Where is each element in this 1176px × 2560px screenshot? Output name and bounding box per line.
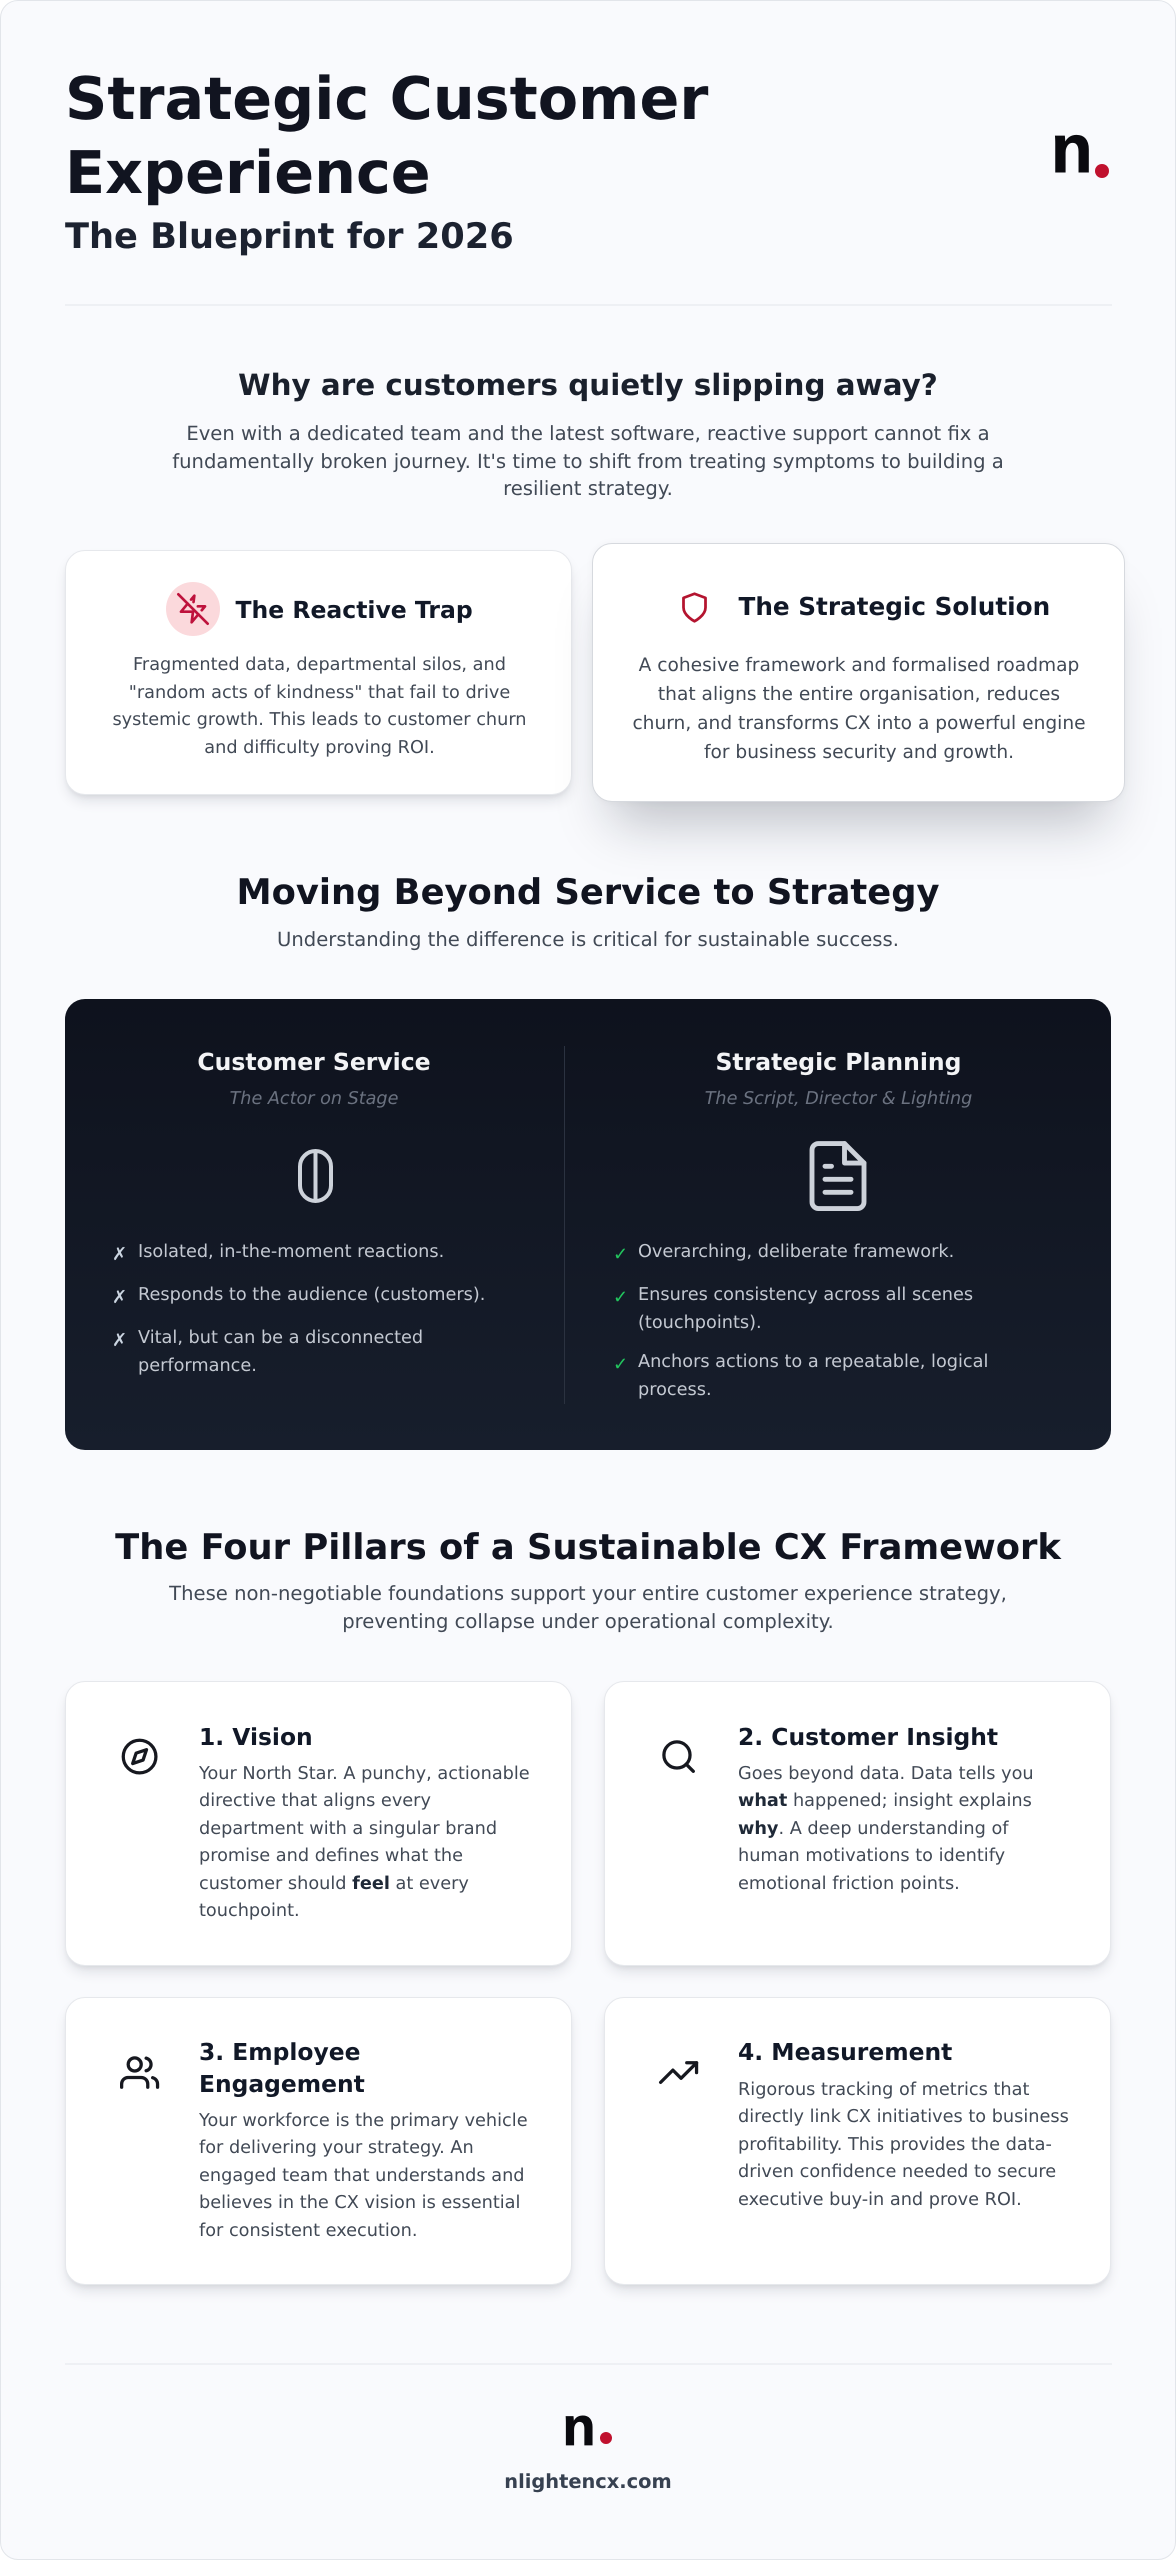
intro paragraph: fundamentally broken journey. It's time to shift from treating symptoms to building a bbox=[172, 450, 1004, 473]
logo: footer: n bbox=[562, 2397, 596, 2457]
section intro: preventing collapse under operational complexity. bbox=[342, 1610, 834, 1633]
pillar text: Goes beyond data. Data tells you bbox=[738, 1764, 1034, 1784]
column: strategic planning bbox=[613, 1048, 988, 1400]
card text: churn, and transforms CX into a powerful engine bbox=[632, 713, 1086, 734]
pillar text: Your North Star. A punchy, actionable bbox=[199, 1764, 530, 1784]
pillar text: touchpoint. bbox=[199, 1901, 300, 1921]
pillar text: promise and defines what the bbox=[199, 1846, 463, 1866]
card text: that aligns the entire organisation, reduces bbox=[658, 684, 1060, 705]
panel: service vs strategy bbox=[65, 999, 1111, 1450]
card text: A cohesive framework and formalised roadmap bbox=[639, 655, 1079, 676]
pillar text: engaged team that understands and bbox=[199, 2166, 525, 2186]
footer url: nlightencx.com bbox=[504, 2470, 672, 2493]
card text: "random acts of kindness" that fail to drive bbox=[129, 683, 510, 703]
list: strategy benefits: ✓ bbox=[613, 1244, 628, 1265]
pillar text: executive buy-in and prove ROI. bbox=[738, 2190, 1022, 2210]
pillar text: Your workforce is the primary vehicle bbox=[199, 2111, 528, 2131]
card text bbox=[112, 655, 527, 758]
card heading: The Strategic Solution bbox=[738, 592, 1050, 621]
card text: for business security and growth. bbox=[704, 742, 1014, 763]
panel: pillar 3 employee engagement bbox=[65, 1997, 572, 2285]
pillar text: believes in the CX vision is essential bbox=[199, 2193, 520, 2213]
intro paragraph: Even with a dedicated team and the latest software, reactive support cannot fix a bbox=[186, 422, 990, 445]
icon: trending up bbox=[658, 2061, 698, 2084]
list: strategy benefits bbox=[613, 1242, 988, 1400]
heading: moving beyond: Moving Beyond Service to Strategy bbox=[236, 872, 940, 912]
list: service limitations bbox=[112, 1242, 485, 1376]
icon: zap off bbox=[166, 582, 220, 636]
list: strategy benefits: Overarching, deliberate framework. bbox=[638, 1242, 954, 1262]
card heading: The Reactive Trap bbox=[236, 596, 473, 624]
list: service limitations: Isolated, in-the-moment reactions. bbox=[138, 1242, 444, 1262]
panel: the strategic solution bbox=[592, 543, 1124, 802]
list: service limitations: ✗ bbox=[112, 1330, 127, 1351]
list: service limitations: Vital, but can be a disconnected bbox=[138, 1328, 423, 1348]
intro paragraph bbox=[172, 422, 1004, 500]
column heading: Customer Service bbox=[197, 1048, 431, 1076]
pillar text: emotional friction points. bbox=[738, 1874, 960, 1894]
pillar heading: 4. Measurement bbox=[738, 2038, 952, 2066]
icon: document bbox=[810, 1141, 866, 1211]
heading: four pillars: The Four Pillars of a Sustainable CX Framework bbox=[115, 1526, 1061, 1568]
list: strategy benefits: ✓ bbox=[613, 1287, 628, 1308]
pillar text: for delivering your strategy. An bbox=[199, 2138, 474, 2158]
list: strategy benefits: Anchors actions to a repeatable, logical bbox=[638, 1352, 988, 1372]
pillar text: Rigorous tracking of metrics that bbox=[738, 2080, 1029, 2100]
list: strategy benefits: ✓ bbox=[613, 1354, 628, 1375]
pillar text bbox=[199, 2111, 528, 2241]
card text bbox=[632, 655, 1086, 763]
card text: systemic growth. This leads to customer churn bbox=[112, 710, 527, 730]
list: service limitations: ✗ bbox=[112, 1244, 127, 1265]
pillar text: for consistent execution. bbox=[199, 2221, 417, 2241]
icon: search bbox=[662, 1740, 695, 1773]
intro paragraph: resilient strategy. bbox=[503, 477, 673, 500]
icon: actor bbox=[298, 1149, 333, 1203]
pillar text bbox=[738, 1764, 1034, 1894]
section intro: Understanding the difference is critical for sustainable success. bbox=[277, 928, 899, 951]
card text: Fragmented data, departmental silos, and bbox=[133, 655, 506, 675]
panel: pillar 2 customer insight bbox=[604, 1681, 1111, 1966]
pillar heading: 2. Customer Insight bbox=[738, 1723, 998, 1751]
pillar heading bbox=[199, 2038, 365, 2098]
section intro: These non-negotiable foundations support your entire customer experience strategy, bbox=[169, 1582, 1007, 1605]
list: service limitations: performance. bbox=[138, 1356, 257, 1376]
card text: and difficulty proving ROI. bbox=[204, 738, 435, 758]
section intro bbox=[169, 1582, 1007, 1633]
list: service limitations: Responds to the audience (customers). bbox=[138, 1285, 485, 1305]
title: Experience bbox=[65, 138, 431, 206]
panel: the reactive trap bbox=[65, 550, 572, 795]
logo: header: n bbox=[1051, 111, 1093, 187]
logo: footer bbox=[562, 2397, 612, 2457]
column subtitle: The Actor on Stage bbox=[230, 1089, 398, 1109]
list: strategy benefits: Ensures consistency across all scenes bbox=[638, 1285, 973, 1305]
pillar text bbox=[199, 1764, 530, 1921]
pillar text: directive that aligns every bbox=[199, 1791, 431, 1811]
subtitle: The Blueprint for 2026 bbox=[65, 216, 514, 257]
pillar text: what happened; insight explains bbox=[738, 1791, 1032, 1811]
pillar heading: Engagement bbox=[199, 2070, 365, 2098]
panel: pillar 1 vision bbox=[65, 1681, 572, 1966]
icon: compass bbox=[122, 1738, 158, 1774]
pillar text: department with a singular brand bbox=[199, 1819, 497, 1839]
title: Strategic Customer bbox=[65, 64, 708, 133]
pillar text bbox=[738, 2080, 1069, 2210]
pillar text: customer should feel at every bbox=[199, 1874, 469, 1894]
pillar text: why. A deep understanding of bbox=[738, 1819, 1009, 1839]
pillar text: driven confidence needed to secure bbox=[738, 2162, 1056, 2182]
pillar text: human motivations to identify bbox=[738, 1846, 1005, 1866]
pillar heading: 1. Vision bbox=[199, 1723, 313, 1751]
panel: pillar 4 measurement bbox=[604, 1997, 1111, 2285]
list: strategy benefits: (touchpoints). bbox=[638, 1313, 762, 1333]
pillar text: profitability. This provides the data- bbox=[738, 2135, 1052, 2155]
pillar text: directly link CX initiatives to business bbox=[738, 2107, 1069, 2127]
icon: shield bbox=[682, 592, 707, 623]
title bbox=[65, 64, 708, 206]
column subtitle: The Script, Director & Lighting bbox=[705, 1089, 972, 1109]
icon: users bbox=[120, 2056, 160, 2089]
column heading: Strategic Planning bbox=[716, 1048, 961, 1076]
pillar heading: 3. Employee bbox=[199, 2038, 360, 2066]
column: customer service bbox=[112, 1048, 485, 1376]
list: service limitations: ✗ bbox=[112, 1287, 127, 1308]
heading: why: Why are customers quietly slipping away? bbox=[238, 368, 938, 402]
list: strategy benefits: process. bbox=[638, 1380, 712, 1400]
